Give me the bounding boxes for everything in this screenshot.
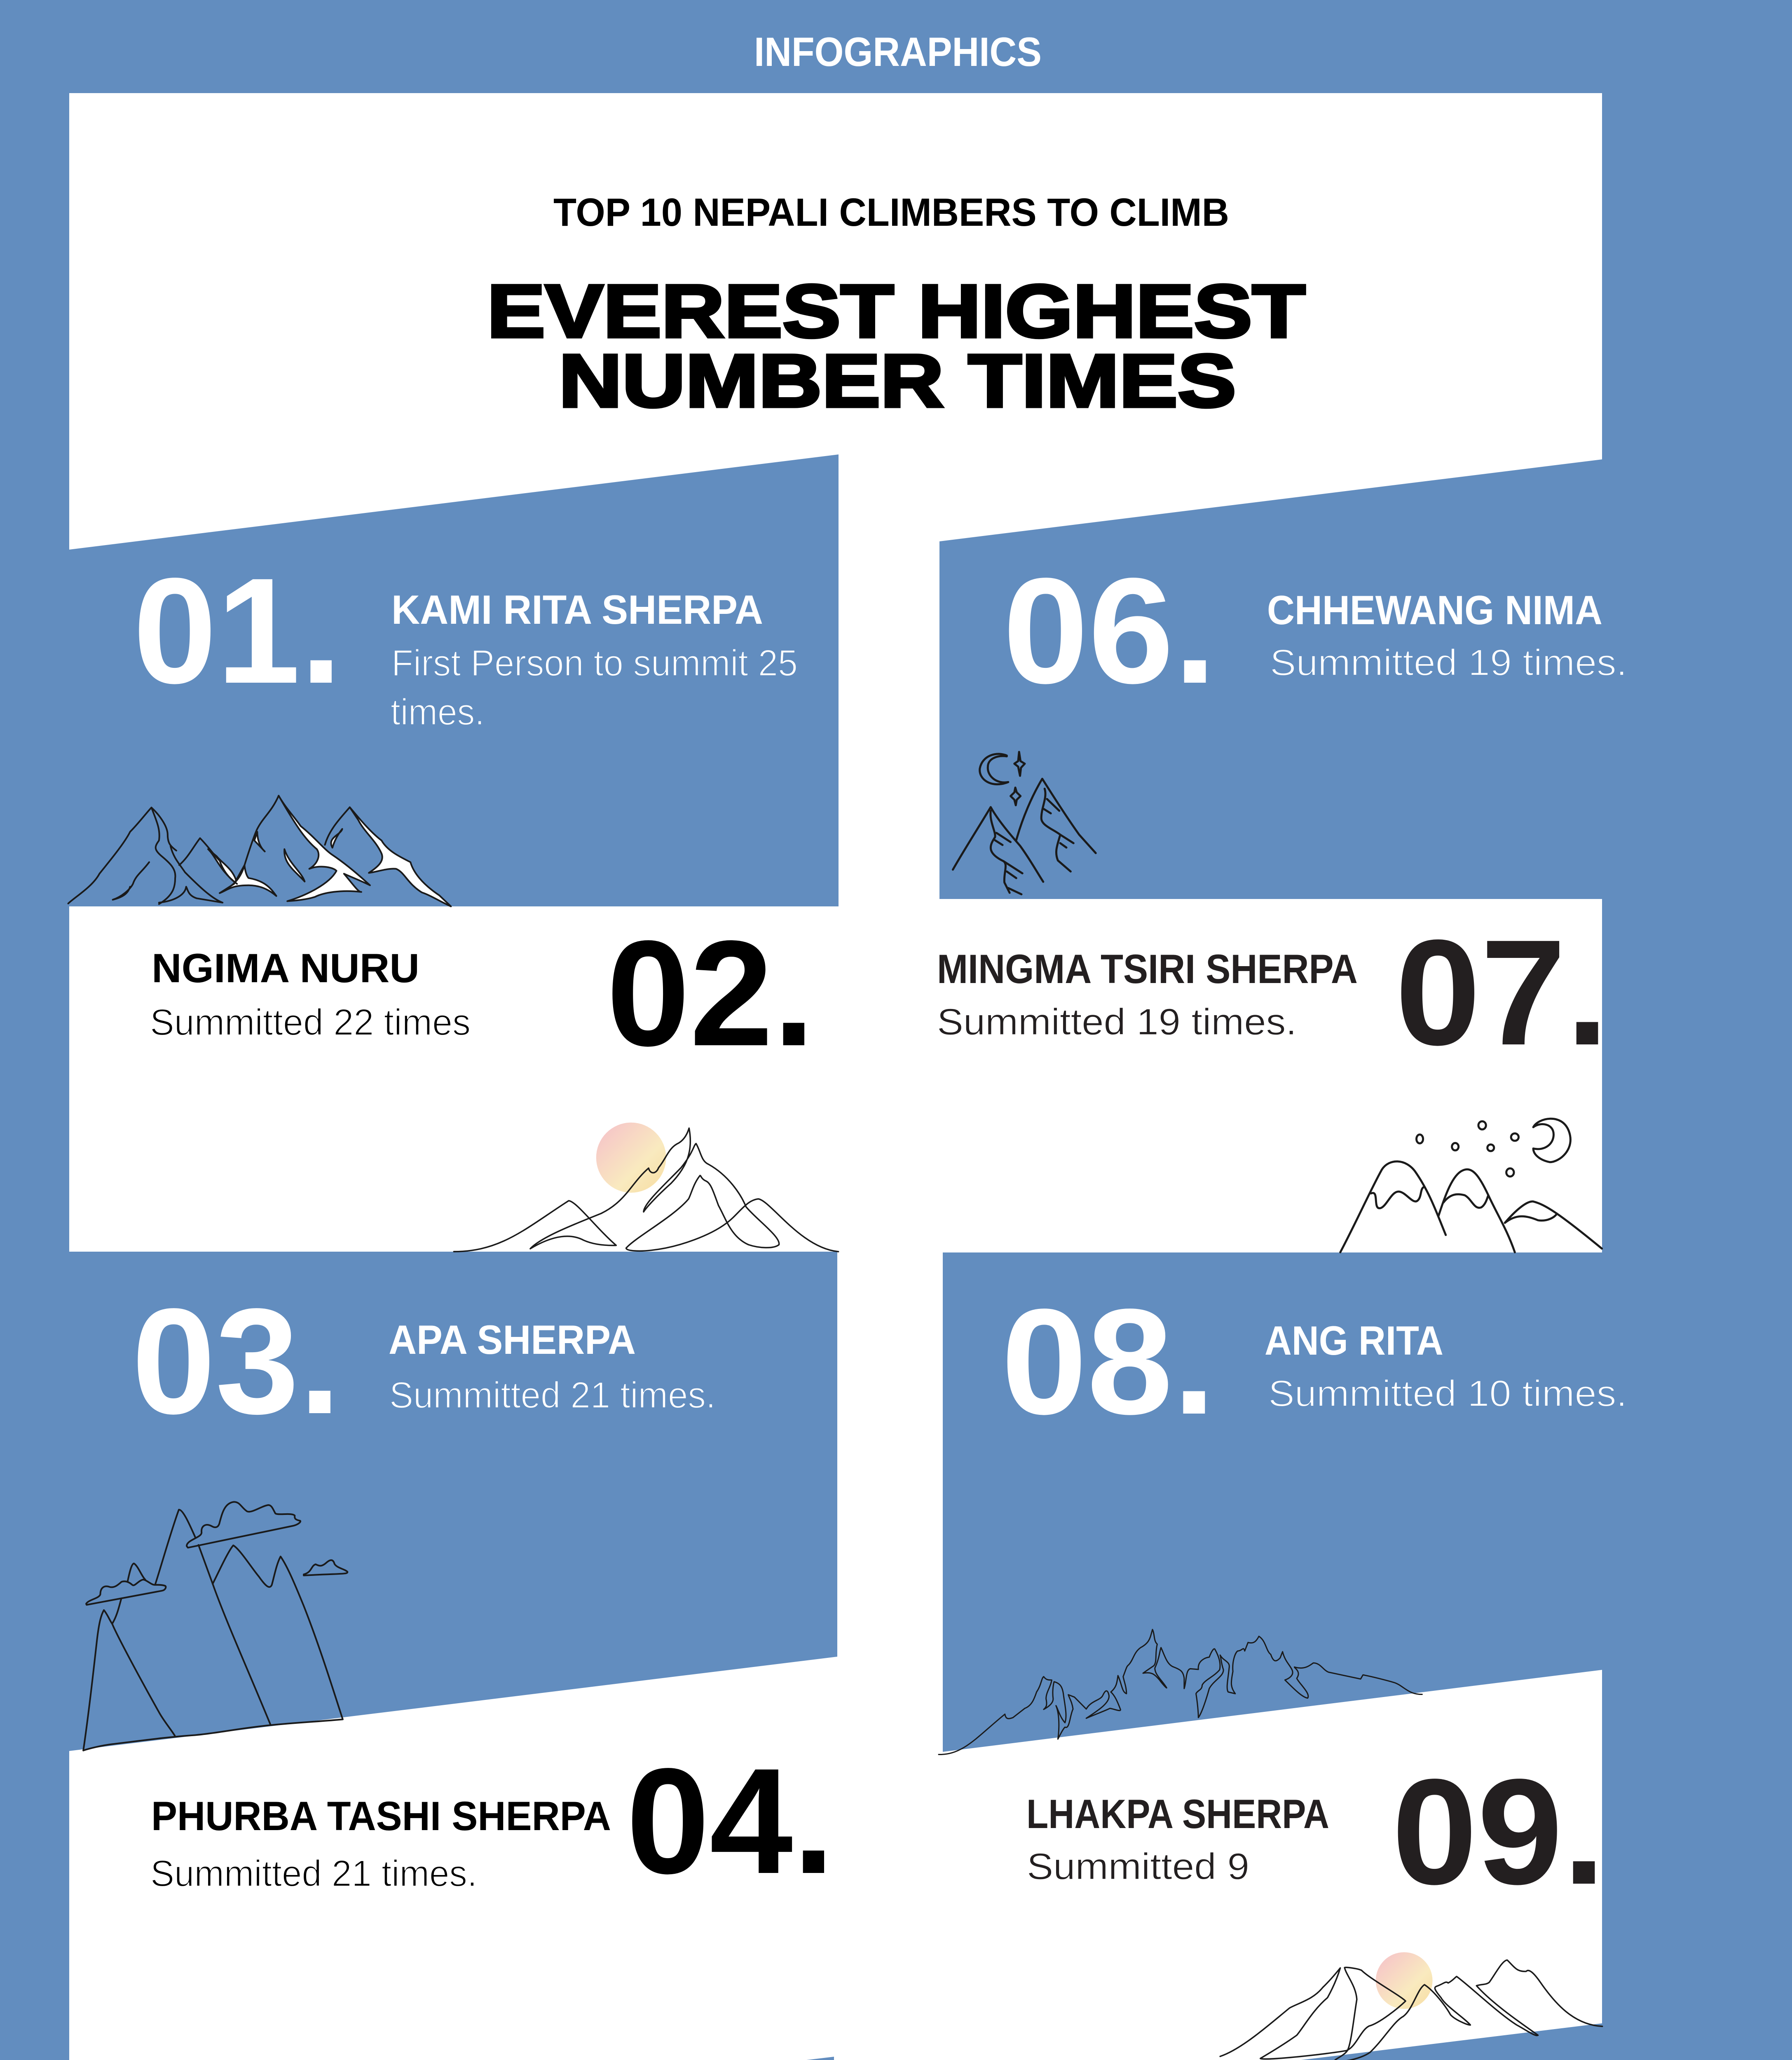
name: KAMI RITA SHERPA — [391, 587, 763, 632]
panel: 04 Phurba Tashi Sherpa — [150, 1737, 834, 1905]
icon: line mountains — [1220, 1960, 1602, 2060]
name: ANG RITA — [1265, 1318, 1443, 1363]
main title line 2: NUMBER TIMES — [559, 339, 1236, 423]
panel: 09 Lhakpa Sherpa — [1026, 1748, 1605, 2060]
panel: 03 Apa Sherpa — [83, 1278, 716, 1751]
name: CHHEWANG NIMA — [1267, 587, 1602, 633]
number 06: 06. — [1003, 547, 1216, 715]
description: Summitted 19 times. — [1270, 642, 1627, 684]
subtitle: TOP 10 NEPALI CLIMBERS TO CLIMB — [553, 190, 1229, 234]
description: Summitted 21 times. — [150, 1853, 477, 1894]
panel: 08 Ang Rita — [939, 1278, 1627, 1754]
number 09: 09. — [1392, 1748, 1605, 1916]
number 08: 08. — [1001, 1278, 1216, 1446]
icon: line mountains — [454, 1128, 839, 1252]
panel: 02 Ngima Nuru — [150, 910, 839, 1252]
icon: sun and line mountains — [454, 1123, 839, 1252]
description: First Person to summit 25 — [391, 643, 798, 684]
icon: sun — [1376, 1952, 1433, 2009]
name: LHAKPA SHERPA — [1026, 1791, 1329, 1837]
icon: snowy mountains — [68, 796, 451, 906]
panel: 07 Mingma Tsiri Sherpa — [937, 909, 1609, 1252]
panel: 01 Kami Rita Sherpa — [68, 547, 798, 906]
description: Summitted 19 times. — [937, 1002, 1297, 1043]
number 01: 01. — [133, 547, 342, 715]
description: Summitted 10 times. — [1268, 1373, 1627, 1414]
number 02: 02. — [607, 910, 815, 1077]
panel: 06 Chhewang Nima — [953, 547, 1627, 894]
icon: moon, stars and mountains — [953, 752, 1096, 894]
icon: moon, dots and mountains — [1340, 1119, 1602, 1252]
icon: mountain range line — [939, 1629, 1422, 1754]
top label: infographics: INFOGRAPHICS — [754, 29, 1042, 75]
description: Summitted 22 times — [150, 1002, 471, 1043]
description: Summitted 21 times. — [389, 1375, 716, 1416]
title block — [487, 190, 1305, 423]
icon: sun and line mountains — [1220, 1952, 1602, 2060]
icon: sun — [596, 1123, 666, 1193]
name: APA SHERPA — [389, 1317, 636, 1362]
main title line 1: EVEREST HIGHEST — [487, 269, 1305, 353]
name: NGIMA NURU — [152, 945, 419, 991]
description: Summitted 9 — [1027, 1846, 1249, 1887]
description line 2: times. — [391, 692, 485, 733]
number 07: 07. — [1395, 909, 1609, 1077]
name: MINGMA TSIRI SHERPA — [937, 946, 1358, 992]
icon: mountains with clouds — [83, 1502, 347, 1751]
number 04: 04. — [626, 1737, 834, 1905]
name: PHURBA TASHI SHERPA — [151, 1793, 611, 1839]
number 03: 03. — [132, 1278, 341, 1445]
